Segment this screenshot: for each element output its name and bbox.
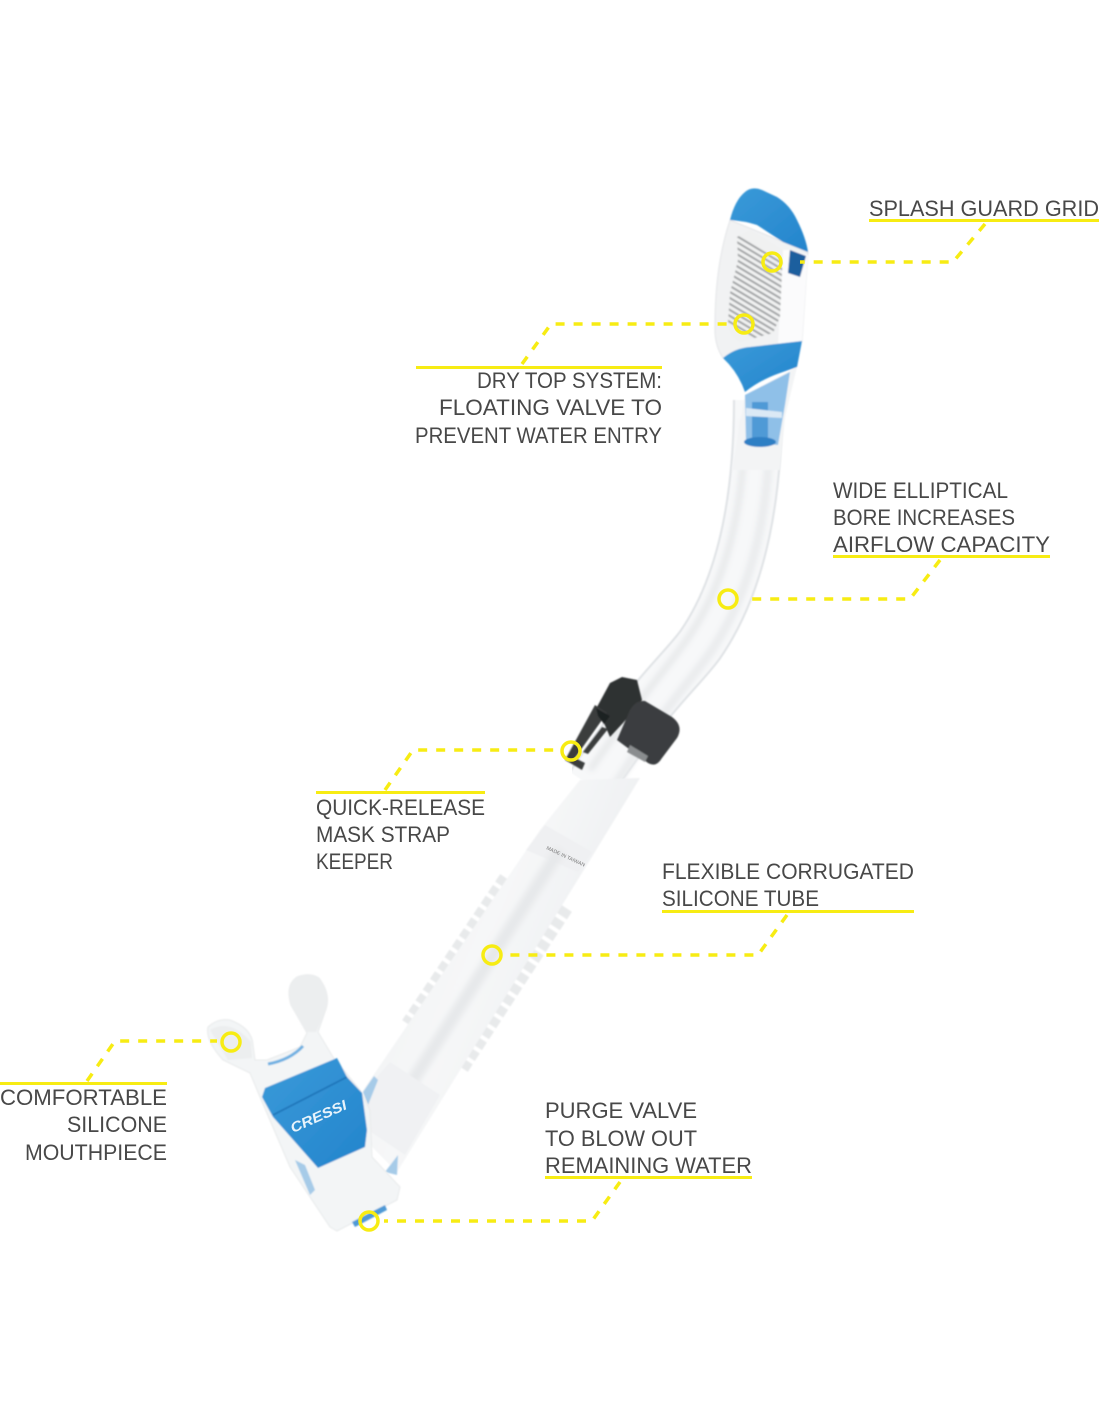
label text	[662, 859, 914, 911]
leader line	[745, 560, 940, 599]
inner blue tube	[745, 372, 790, 445]
callout: splash guard grid	[763, 196, 1099, 271]
label text	[833, 478, 1050, 557]
label text	[316, 795, 485, 874]
marker	[562, 742, 580, 760]
marker	[763, 253, 781, 271]
underline	[316, 791, 485, 794]
label text: AIRFLOW CAPACITY	[833, 532, 1050, 557]
snorkel product illustration	[208, 188, 808, 1231]
label text: COMFORTABLE	[0, 1085, 167, 1110]
blue collar	[723, 341, 802, 392]
callout: quick-release keeper	[316, 742, 580, 874]
label text: REMAINING WATER	[545, 1153, 752, 1178]
callout: purge valve	[360, 1098, 752, 1230]
callout: silicone mouthpiece	[0, 1033, 240, 1165]
label text: SPLASH GUARD GRID	[869, 196, 1099, 221]
tube marking: MADE IN TAIWAN	[545, 845, 586, 869]
marker	[735, 315, 753, 333]
dark valve tab	[788, 250, 806, 277]
marker	[360, 1212, 378, 1230]
callout: flexible corrugated tube	[483, 859, 914, 964]
label text: DRY TOP SYSTEM:	[477, 368, 662, 393]
label text: PREVENT WATER ENTRY	[415, 423, 662, 448]
label text	[415, 368, 662, 448]
mouthpiece	[208, 975, 400, 1231]
lower tube body	[362, 778, 640, 1175]
upper curved tube	[590, 400, 770, 790]
callout: wide elliptical bore	[719, 478, 1050, 608]
label text: PURGE VALVE	[545, 1098, 697, 1123]
corrugated tube ribs	[408, 878, 566, 1068]
label text	[545, 1098, 752, 1178]
label text: SILICONE TUBE	[662, 886, 819, 911]
marker	[719, 590, 737, 608]
label text: FLOATING VALVE TO	[439, 395, 662, 420]
label text: FLEXIBLE CORRUGATED	[662, 859, 914, 884]
leader line	[522, 324, 730, 364]
mask strap keeper clip	[565, 677, 680, 770]
leader line	[505, 915, 787, 955]
underline	[833, 555, 1050, 558]
label text	[0, 1085, 167, 1165]
label text: TO BLOW OUT	[545, 1126, 697, 1151]
callout: dry top system	[415, 315, 753, 448]
marker	[222, 1033, 240, 1051]
underline	[416, 366, 662, 369]
label text: KEEPER	[316, 849, 393, 874]
splash guard grid	[728, 236, 783, 338]
leader line	[87, 1041, 217, 1081]
marker	[483, 946, 501, 964]
underline	[662, 910, 914, 913]
label text: MASK STRAP	[316, 822, 450, 847]
underline	[545, 1176, 752, 1179]
underline	[869, 219, 1099, 222]
label text: WIDE ELLIPTICAL	[833, 478, 1008, 503]
dry top head	[715, 188, 808, 470]
leader line	[800, 224, 985, 262]
label text: QUICK-RELEASE	[316, 795, 485, 820]
leader line	[385, 750, 558, 790]
mouthpiece logo: CRESSI	[288, 1096, 350, 1136]
blue top cap	[730, 188, 808, 252]
leader line	[384, 1182, 620, 1221]
label text: SILICONE	[67, 1112, 167, 1137]
label text: MOUTHPIECE	[25, 1140, 167, 1165]
underline	[0, 1082, 167, 1085]
label text: BORE INCREASES	[833, 505, 1015, 530]
